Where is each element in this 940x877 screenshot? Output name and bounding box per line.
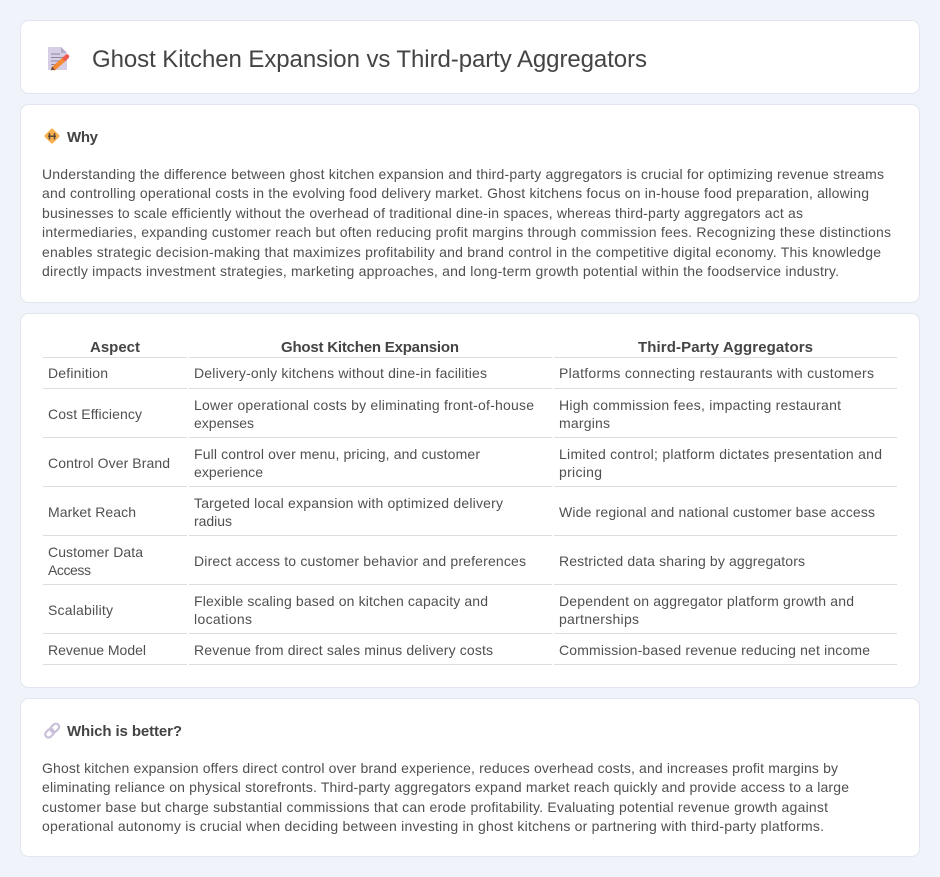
row: cost efficiency xyxy=(48,397,841,431)
row: cost efficiency: Lower operational costs by eliminating front-of-house xyxy=(194,397,534,413)
row: customer data access: Direct access to customer behavior and preferences xyxy=(194,553,526,569)
row: definition xyxy=(48,365,874,381)
row: cost efficiency: margins xyxy=(559,415,610,431)
row: scalability: locations xyxy=(194,611,252,627)
row: cost efficiency: expenses xyxy=(194,415,254,431)
panel: which is better xyxy=(20,698,920,856)
text block: why paragraph: intermediaries, expanding customer reach but often reducing profit margins through commission fees. Recognizing these distinctions xyxy=(42,224,891,240)
text block: which is better paragraph: operational autonomy is crucial when deciding between investing in ghost kitchens or partnering with third-party platforms. xyxy=(42,818,824,834)
panel: title card xyxy=(20,20,920,94)
text block: why paragraph: Understanding the difference between ghost kitchen expansion and third-party aggregators is crucial for optimizing revenue streams xyxy=(42,166,884,182)
row: control over brand: Limited control; platform dictates presentation and xyxy=(559,446,882,462)
row: market reach: Targeted local expansion with optimized delivery xyxy=(194,495,503,511)
text block: why paragraph: directly impacts investment strategies, marketing approaches, and long-term growth potential within the foodservice industry. xyxy=(42,263,839,279)
row: market reach: Market Reach xyxy=(48,504,136,520)
row: control over brand: experience xyxy=(194,464,263,480)
text block: why paragraph: businesses to scale efficiently without the overhead of traditional dine-in spaces, whereas third-party aggregators act as xyxy=(42,205,803,221)
row: scalability: Flexible scaling based on kitchen capacity and xyxy=(194,593,488,609)
icon: chain link xyxy=(44,722,60,739)
row: market reach: radius xyxy=(194,513,232,529)
row: scalability: Dependent on aggregator platform growth and xyxy=(559,593,854,609)
row: customer data access xyxy=(48,544,805,578)
row: scalability: partnerships xyxy=(559,611,639,627)
row: definition: Delivery-only kitchens without dine-in facilities xyxy=(194,365,487,381)
row: control over brand xyxy=(48,446,882,480)
text block: which is better paragraph: eliminating reliance on physical storefronts. Third-party aggregators expand market reach quickly and provide access to a large xyxy=(42,779,849,795)
table header row: Aspect xyxy=(90,339,140,356)
row: revenue model: Commission-based revenue reducing net income xyxy=(559,642,870,658)
row: revenue model xyxy=(48,642,870,658)
row: customer data access: Customer Data xyxy=(48,544,143,560)
row: control over brand: pricing xyxy=(559,464,602,480)
text block: why paragraph xyxy=(42,166,891,279)
row: customer data access: Restricted data sharing by aggregators xyxy=(559,553,805,569)
table header row xyxy=(90,339,813,356)
row: cost efficiency: Cost Efficiency xyxy=(48,406,142,422)
table header row: Third-Party Aggregators xyxy=(638,339,813,356)
heading: which is better: Which is better? xyxy=(67,723,182,740)
row: cost efficiency: High commission fees, impacting restaurant xyxy=(559,397,841,413)
row: scalability xyxy=(48,593,854,627)
row: control over brand: Full control over menu, pricing, and customer xyxy=(194,446,480,462)
table header row: Ghost Kitchen Expansion xyxy=(281,339,459,356)
text block: which is better paragraph: Ghost kitchen expansion offers direct control over brand experience, reduces overhead costs, and increases profit margins by xyxy=(42,760,838,776)
text block: which is better paragraph xyxy=(42,760,849,834)
row: market reach: Wide regional and national customer base access xyxy=(559,504,875,520)
panel: comparison table xyxy=(20,314,920,688)
icon: memo with pencil xyxy=(48,47,67,70)
row: customer data access: Access xyxy=(48,562,91,578)
heading: why: Why xyxy=(67,129,99,146)
panel: why xyxy=(20,104,920,302)
icon: warning diamond xyxy=(44,128,60,144)
row: market reach xyxy=(48,495,875,529)
title: Ghost Kitchen Expansion vs Third-party Aggregators xyxy=(92,46,647,73)
row: scalability: Scalability xyxy=(48,602,113,618)
row: revenue model: Revenue Model xyxy=(48,642,146,658)
text block: which is better paragraph: customer base but charge substantial commissions that can erode profitability. Evaluating potential revenue growth against xyxy=(42,799,828,815)
text block: why paragraph: and controlling operational costs in the evolving food delivery market. Ghost kitchens focus on in-house food preparation, allowing xyxy=(42,185,869,201)
text block: why paragraph: enables strategic decision-making that maximizes profitability and brand control in the competitive digital economy. This knowledge xyxy=(42,244,881,260)
row: definition: Definition xyxy=(48,365,108,381)
row: revenue model: Revenue from direct sales minus delivery costs xyxy=(194,642,493,658)
row: definition: Platforms connecting restaurants with customers xyxy=(559,365,874,381)
row: control over brand: Control Over Brand xyxy=(48,455,170,471)
